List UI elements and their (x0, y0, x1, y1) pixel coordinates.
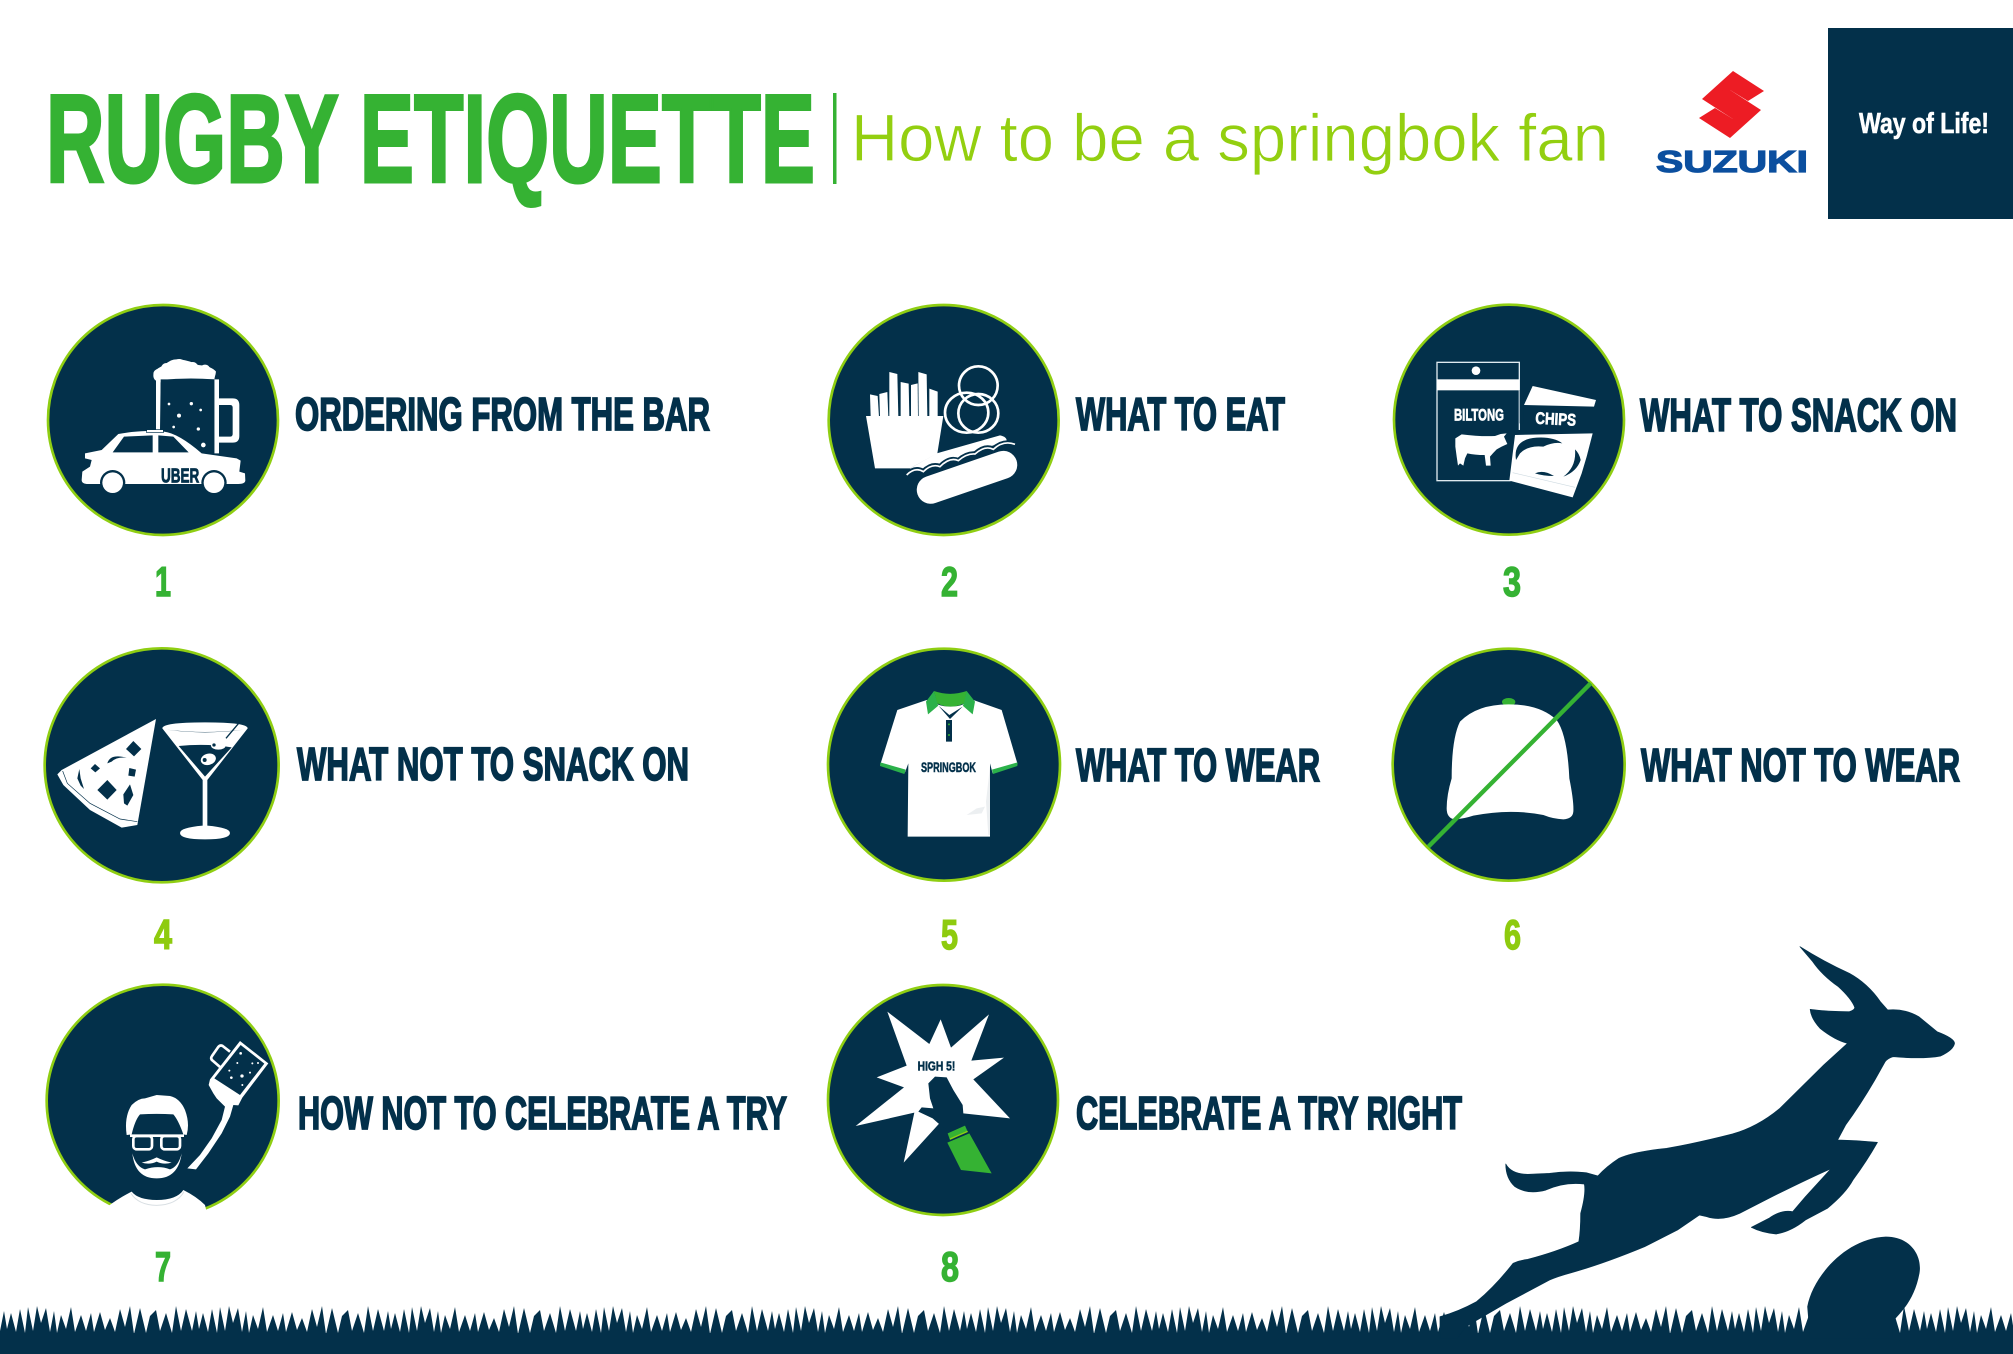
label: HOW NOT TO CELEBRATE A TRY (298, 1087, 787, 1139)
icon: springbok jersey: SPRINGBOK (921, 760, 976, 775)
suzuki logo (1656, 71, 1808, 179)
panel: what to snack on (1394, 305, 1957, 605)
icon: high five burst (828, 985, 1058, 1215)
number 8: 8 (941, 1243, 959, 1290)
number 2: 2 (941, 558, 958, 605)
icon: pizza and martini (45, 648, 279, 882)
number 5: 5 (941, 911, 958, 958)
panel: how not to celebrate a try (47, 985, 787, 1290)
icon: biltong and chips: CHIPS (1535, 409, 1577, 430)
number 3: 3 (1503, 558, 1521, 605)
label: WHAT TO WEAR (1076, 739, 1320, 791)
number 6: 6 (1504, 911, 1521, 958)
icon: uber and beer: UBER (161, 464, 199, 487)
icon: biltong and chips: BILTONG (1454, 405, 1504, 424)
title: RUGBY ETIQUETTE (46, 70, 815, 209)
icon: high five burst: HIGH 5! (918, 1059, 955, 1073)
springbok leaping over rugby ball (1440, 947, 1955, 1338)
icon: biltong and chips (1394, 305, 1624, 535)
number 7: 7 (155, 1243, 171, 1290)
icon: springbok jersey (828, 649, 1060, 881)
number 4: 4 (154, 911, 172, 958)
panel: way of life (1828, 28, 2013, 219)
label: CELEBRATE A TRY RIGHT (1076, 1087, 1462, 1139)
panel: what to eat (829, 305, 1285, 605)
label: ORDERING FROM THE BAR (295, 388, 710, 440)
grass strip (0, 1305, 2013, 1354)
title separator (833, 93, 836, 184)
icon: fan spilling beer (47, 985, 279, 1227)
springbok silhouette (1440, 947, 1955, 1338)
subtitle: How to be a springbok fan (851, 101, 1609, 176)
label: WHAT TO EAT (1076, 388, 1285, 440)
icon: crossed-out cap (1393, 649, 1625, 881)
panel: celebrate a try right (828, 985, 1462, 1290)
suzuki wordmark: SUZUKI (1656, 144, 1808, 179)
panel: what not to snack on (45, 648, 689, 958)
panel: ordering from the bar (48, 305, 710, 605)
panel: what not to wear (1393, 649, 1960, 958)
panel: what to wear (828, 649, 1320, 958)
icon: uber and beer (48, 305, 278, 535)
number 1: 1 (155, 558, 171, 605)
label: WHAT NOT TO SNACK ON (297, 738, 689, 790)
icon: fries, onion rings and hot dog (829, 305, 1059, 535)
rugby ball (1807, 1237, 1920, 1338)
icon: suzuki S mark (1699, 71, 1764, 138)
